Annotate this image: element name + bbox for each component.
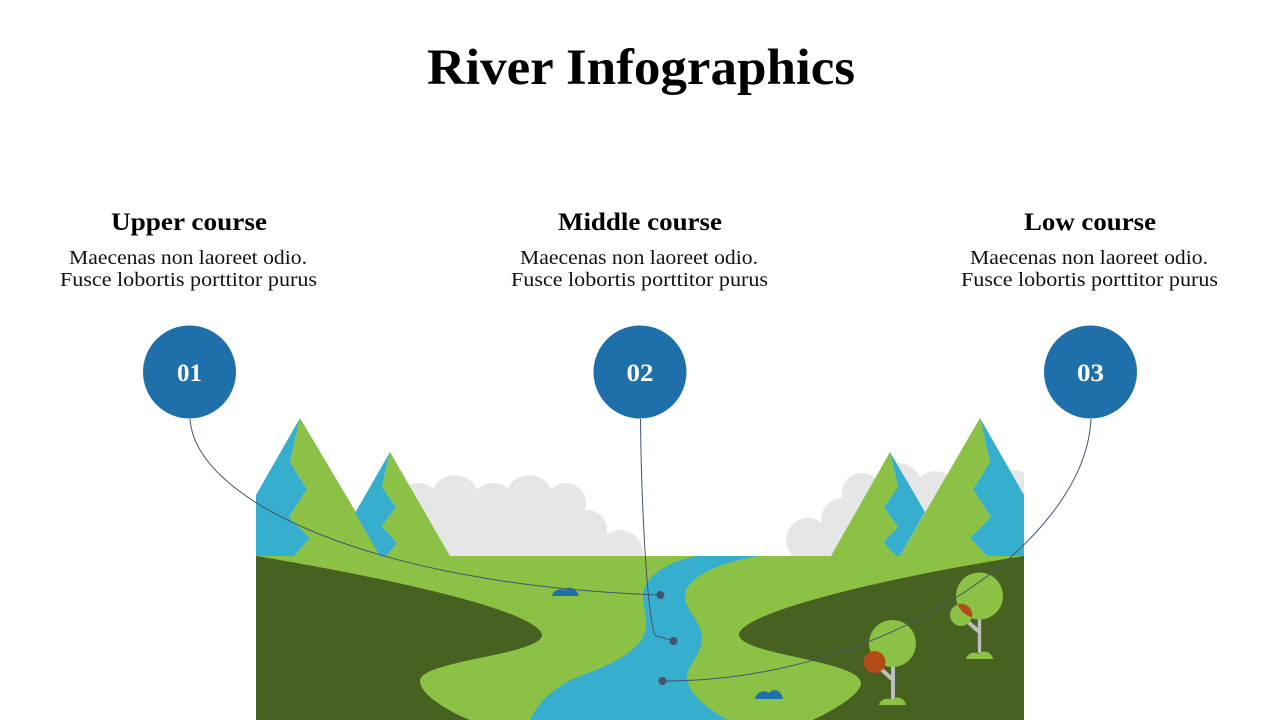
left mountain, small [355,452,450,556]
tree, front [864,620,916,705]
number badge 02 [594,326,686,418]
heading: low course: Low course [1024,209,1156,236]
number badge 02: 02 [626,360,654,387]
right dark hill [739,556,1024,720]
description: upper course: Maecenas non laoreet odio. [69,247,307,269]
bush, upper bank [552,588,579,596]
description: low course: Fusce lobortis porttitor purus [961,269,1218,291]
number badge 01 [143,326,236,418]
description: middle course: Fusce lobortis porttitor purus [511,269,768,291]
number badge 01: 01 [177,360,202,387]
description: upper course: Fusce lobortis porttitor purus [60,269,317,291]
connector line: middle course [640,419,678,645]
panel: upper course text [60,209,317,291]
right mountain, large [900,418,1024,556]
green ground [256,556,1024,720]
description: middle course: Maecenas non laoreet odio. [520,247,758,269]
description: low course [961,247,1218,291]
title: River Infographics [427,40,855,96]
left cloud [395,475,643,576]
description: middle course [511,247,768,291]
heading: middle course: Middle course [558,209,722,236]
connector line: low course [658,419,1091,685]
heading: upper course: Upper course [111,209,267,236]
bush, lower bank [755,690,783,699]
description: low course: Maecenas non laoreet odio. [970,247,1208,269]
left mountain, large [256,418,382,556]
panel: middle course text [511,209,768,291]
right cloud [786,463,1024,562]
number badge 03 [1044,326,1137,418]
river landscape illustration [256,418,1024,720]
connector line: upper course [190,419,664,599]
number badge 03: 03 [1077,360,1104,387]
left dark hill [256,556,542,720]
description: upper course [60,247,317,291]
tree, back [950,572,1003,659]
panel: low course text [961,209,1218,291]
river [530,556,758,720]
right mountain, small [831,452,925,556]
